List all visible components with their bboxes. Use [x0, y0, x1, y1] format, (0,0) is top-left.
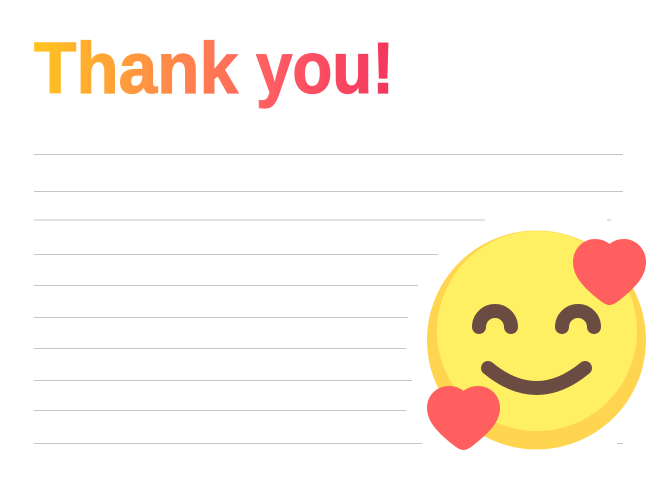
left eye	[479, 311, 511, 327]
title	[34, 29, 394, 109]
title: Thank	[34, 29, 239, 109]
emoji face	[427, 230, 646, 450]
icon: bottom left heart	[427, 386, 500, 450]
icon: smiling emoji with hearts	[427, 230, 646, 450]
title: you!	[256, 29, 394, 109]
thank you card	[34, 40, 646, 450]
icon: top right heart	[573, 239, 646, 305]
right eye	[562, 311, 594, 327]
writing lines	[34, 154, 623, 444]
mouth	[488, 368, 585, 388]
